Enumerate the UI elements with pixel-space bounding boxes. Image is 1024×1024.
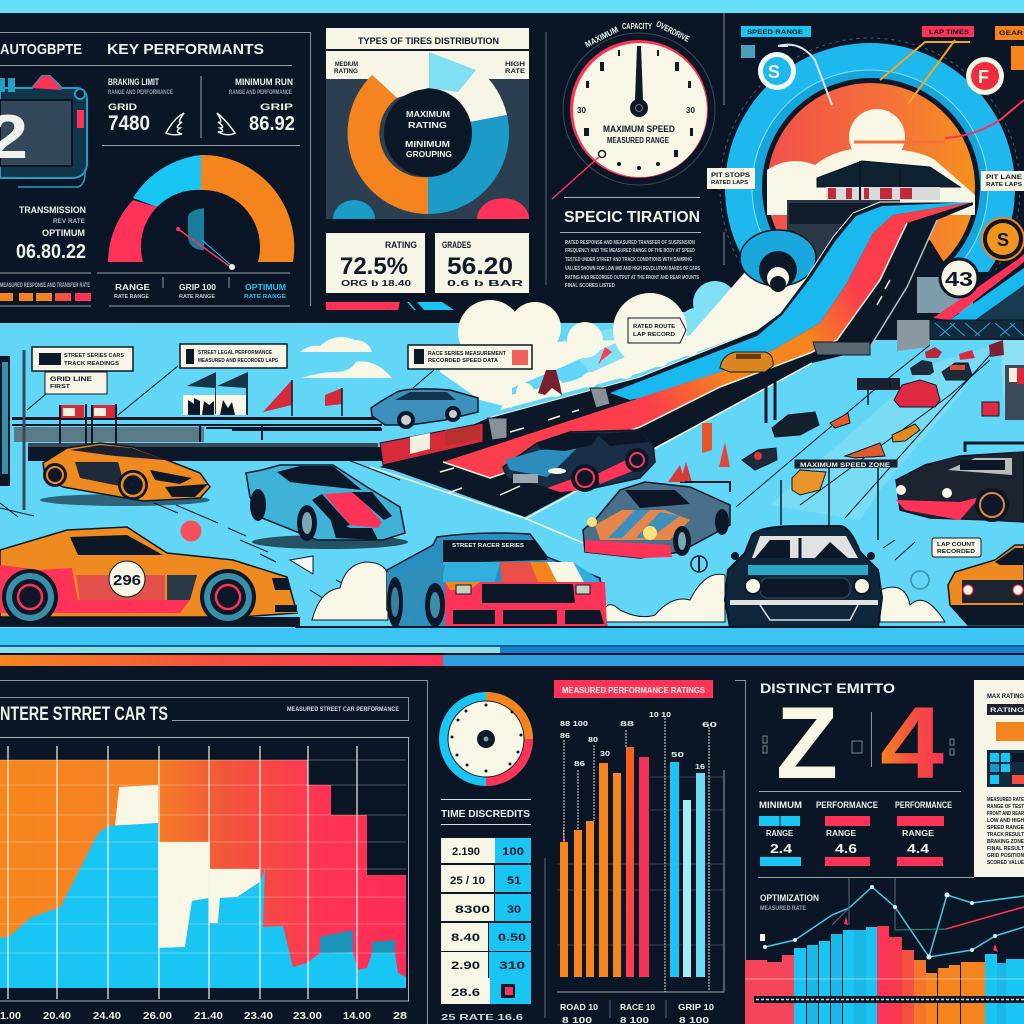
sign: left pylon bbox=[0, 350, 24, 510]
gauge footer labels: GRIP 100 bbox=[179, 283, 217, 292]
paragraph text: VALUES SHOWN FOR LOW MID AND HIGH REVOLUTION BANDS OF CARS bbox=[565, 266, 700, 272]
chart x-axis labels: 24.40 bbox=[93, 1011, 121, 1022]
gauge footer labels bbox=[114, 277, 286, 300]
stat: left metric 7480: 7480 bbox=[108, 112, 150, 135]
callout: cloud label: LAP RECORD bbox=[633, 332, 675, 338]
callout tags: PIT STOPS bbox=[711, 173, 750, 179]
legend: colour swatches bbox=[0, 293, 91, 301]
clouds: small sky clouds bbox=[300, 337, 392, 378]
callout: cloud label: RATED ROUTE bbox=[633, 324, 675, 330]
table: rows bbox=[441, 838, 531, 1004]
gauge: clock dial: MAXIMUM SPEED bbox=[603, 124, 675, 134]
stat: left readout 06.80.22: REV RATE bbox=[53, 219, 85, 225]
chart: category labels: ROAD 10 bbox=[560, 1002, 598, 1012]
heading: chart title: OPTIMIZATION bbox=[760, 893, 819, 904]
stat: right metric 86.92: MINIMUM RUN bbox=[235, 77, 293, 87]
chart: value labels: 80 bbox=[588, 735, 598, 744]
cars: distant small cars bbox=[742, 340, 1024, 495]
chart: value labels: 16 bbox=[695, 762, 705, 771]
gauge footer labels: OPTIMUM bbox=[245, 283, 286, 292]
paragraph text: FINAL SCORES LISTED bbox=[565, 283, 615, 289]
donut small labels: RATE bbox=[505, 69, 525, 75]
panel: tires donut chart bbox=[326, 28, 529, 219]
heading: street car stats: NTERE STRRET CAR TS bbox=[0, 704, 168, 725]
marker: small icons on road bbox=[691, 540, 929, 589]
strip: colour bar bbox=[0, 655, 1024, 666]
donut small labels: RATING bbox=[334, 69, 358, 75]
chart: bars bbox=[560, 747, 705, 977]
road baseline and foreground bbox=[0, 625, 1024, 653]
heading: key performance: KEY PERFORMANTS bbox=[107, 41, 264, 58]
stat group: column 3: RANGE bbox=[902, 829, 935, 838]
chart x-axis labels bbox=[0, 1011, 408, 1022]
gauge: clock dial: CAPACITY bbox=[622, 21, 652, 31]
chart x-axis labels: 28 bbox=[393, 1011, 408, 1022]
chart x-axis labels: 21.40 bbox=[194, 1011, 224, 1022]
chart: category labels: GRIP 10 bbox=[678, 1002, 714, 1012]
stat group: column 1 bbox=[759, 800, 802, 866]
badge: number 43 bbox=[940, 259, 978, 297]
car: dark blue sedan bbox=[503, 430, 655, 492]
heading: types of: TYPES OF TIRES DISTRIBUTION bbox=[358, 36, 499, 46]
table: rows: 30 bbox=[507, 904, 521, 916]
chart: category labels bbox=[560, 1000, 714, 1024]
callout: road label: LAP COUNT bbox=[937, 542, 976, 548]
gauge footer labels: RATE RANGE bbox=[244, 294, 286, 300]
gauge: clock dial: OVERDRIVE bbox=[655, 19, 691, 44]
car: right orange car bbox=[948, 545, 1024, 625]
table: rows: 51 bbox=[507, 875, 521, 887]
paragraph text on card bbox=[987, 797, 1024, 866]
cones bbox=[680, 381, 775, 482]
chart: value labels: 60 bbox=[702, 720, 717, 729]
gauge footer labels: RATE RANGE bbox=[114, 294, 149, 300]
callout tags: SPEED RANGE bbox=[747, 29, 804, 36]
card: 56.20: 0.6 b BAR bbox=[447, 279, 523, 288]
stat: left metric 7480 bbox=[108, 77, 184, 135]
callout: right label: RECORDED SPEED DATA bbox=[428, 358, 498, 364]
table: rows: 2.90 bbox=[451, 960, 480, 972]
paragraph text: RATING AND RECORDED OUTPUT AT THE FRONT AND REAR MOUNTS bbox=[565, 275, 699, 281]
chart: lines bbox=[760, 878, 1024, 960]
card: 72.5%: ORG b 18.40 bbox=[341, 279, 412, 288]
donut centre labels: MAXIMUM bbox=[406, 109, 450, 119]
icon: grid blocks bbox=[987, 750, 1024, 787]
table: rows: 100 bbox=[502, 846, 524, 858]
callout: left label: STREET SERIES CARS bbox=[64, 353, 124, 359]
illustration: ramp racetrack bbox=[370, 202, 973, 543]
road: far lane bbox=[736, 340, 1024, 520]
accent bars under cards bbox=[326, 302, 454, 310]
callout: right label: RACE SERIES MEASUREMENT bbox=[428, 351, 507, 357]
table: rows: 25 / 10 bbox=[450, 875, 485, 887]
stat: left metric 7480: BRAKING LIMIT bbox=[108, 77, 159, 87]
callout tags bbox=[707, 26, 1024, 191]
paragraph text bbox=[565, 240, 700, 289]
card: 56.20: GRADES bbox=[442, 240, 471, 250]
table: rows: 0.50 bbox=[498, 932, 526, 944]
callout tags: GEAR bbox=[999, 30, 1023, 37]
chart: value labels bbox=[560, 710, 717, 771]
marker: triangle sign bbox=[290, 556, 313, 574]
panel: combo chart bars and lines bbox=[745, 878, 1024, 1024]
banner: sponsor wall bbox=[380, 388, 610, 465]
chart: stacked area bbox=[0, 746, 406, 999]
heading: autogbpte: AUTOGBPTE bbox=[0, 41, 82, 58]
white road edge bbox=[370, 363, 812, 543]
paragraph text: TESTED UNDER STREET AND TRACK CONDITIONS WITH DAMPING bbox=[565, 257, 692, 263]
big numeral 4: 4 bbox=[880, 686, 944, 800]
paragraph text on card: LOW AND HIGH bbox=[987, 818, 1024, 824]
clouds: lower cream puffs bbox=[312, 562, 945, 622]
heading: specific vibration: SPECIC TIRATION bbox=[564, 209, 700, 226]
marker: red pennant bbox=[598, 347, 612, 365]
chart: value labels: 30 bbox=[600, 749, 610, 758]
icon: red circular badge bbox=[880, 40, 1004, 104]
gauge: clock dial bbox=[552, 19, 715, 199]
spectators and flags bbox=[60, 372, 342, 444]
stat: left metric 7480: RANGE AND PERFORMANCE bbox=[108, 90, 173, 96]
callout tags: PIT LANE bbox=[986, 175, 1022, 181]
gauge: clock dial: 30 bbox=[686, 106, 695, 115]
icon: orange circular badge: S bbox=[997, 230, 1009, 250]
stat group: column 2: PERFORMANCE bbox=[816, 800, 878, 810]
table: rows: 28.6 bbox=[451, 987, 480, 999]
icon: tire bbox=[740, 230, 816, 292]
car: orange supercar bbox=[40, 443, 210, 506]
chart x-axis labels: 23.00 bbox=[293, 1011, 323, 1022]
heading: table title: TIME DISCREDITS bbox=[441, 809, 530, 820]
card: 72.5%: RATING bbox=[385, 240, 417, 250]
chart: value labels: 86 bbox=[560, 731, 570, 740]
card: 72.5% bbox=[326, 233, 425, 293]
chart: value labels: 88 100 bbox=[560, 719, 588, 728]
big letter Z: Z bbox=[776, 686, 838, 800]
car: grey front coupe bbox=[583, 465, 730, 558]
chart: value labels: 10 10 bbox=[649, 710, 671, 719]
table: rows: 8300 bbox=[455, 904, 490, 916]
stat group: column 1: MINIMUM bbox=[759, 800, 802, 810]
chart x-axis labels: 14.00 bbox=[343, 1011, 371, 1022]
table: rows: 8.40 bbox=[451, 932, 480, 944]
paragraph text on card: GRID POSITION bbox=[987, 853, 1024, 859]
donut centre labels: MINIMUM bbox=[405, 139, 450, 149]
donut small labels bbox=[334, 62, 525, 75]
stat: right metric 86.92: 86.92 bbox=[249, 113, 295, 135]
callout: left label: TRACK READINGS bbox=[64, 361, 119, 367]
card: 56.20: 56.20 bbox=[447, 253, 513, 280]
paragraph text on card: FINAL RESULT bbox=[987, 846, 1024, 852]
stat group: column 1: RANGE bbox=[766, 829, 794, 838]
stat group: column 3: 4.4 bbox=[907, 841, 930, 856]
callout tags: LAP TIMES bbox=[929, 29, 970, 36]
stat group: column 2: RANGE bbox=[826, 829, 857, 838]
donut centre labels: GROUPING bbox=[406, 149, 452, 159]
building: grandstand bbox=[787, 161, 960, 262]
stat: left readout 06.80.22: TRANSMISSION bbox=[19, 205, 86, 215]
card: 72.5%: 72.5% bbox=[340, 253, 408, 280]
table: rows: 2.190 bbox=[452, 846, 480, 858]
donut centre labels bbox=[405, 109, 452, 159]
sun and clouds bbox=[767, 109, 975, 215]
divider bbox=[200, 76, 202, 138]
chart x-axis labels: 23.40 bbox=[244, 1011, 274, 1022]
badge: car number: 296 bbox=[113, 572, 141, 589]
illustration: circular track sunset bbox=[707, 26, 1024, 338]
heading: red banner bbox=[554, 680, 713, 698]
car: blue car upper bbox=[371, 389, 478, 429]
icon: right wing bbox=[217, 113, 235, 135]
sign: gantry bbox=[781, 460, 897, 540]
heading: distinct: DISTINCT EMITTO bbox=[760, 680, 895, 696]
paragraph text on card: SPEED RANGE bbox=[987, 825, 1024, 831]
icon: orange circular badge bbox=[982, 218, 1024, 260]
chart x-axis labels: 20.40 bbox=[43, 1011, 71, 1022]
callout: left label: GRID LINE bbox=[50, 377, 92, 383]
icon: blue dome bbox=[333, 200, 375, 219]
badge: car number bbox=[109, 561, 145, 597]
panel: distinct rating z4 bbox=[735, 680, 961, 1024]
donut small labels: HIGH bbox=[505, 62, 525, 68]
ramp edge lines bbox=[488, 202, 973, 418]
callout: left label bbox=[27, 347, 133, 410]
icon: dashboard screen with number 2 bbox=[0, 76, 87, 187]
panel: key performance bbox=[0, 32, 310, 306]
stat: right metric 86.92: GRIP bbox=[260, 102, 293, 112]
car: dark front muscle car bbox=[725, 526, 882, 628]
card: 56.20 bbox=[435, 233, 529, 293]
gauge footer labels: RANGE bbox=[115, 283, 151, 292]
header note: MEASURED STREET CAR PERFORMANCE bbox=[287, 706, 400, 713]
panel: bar chart bbox=[545, 680, 724, 1024]
gauge: clock dial: MAXIMUM bbox=[583, 24, 620, 49]
icon: blue circular badge: S bbox=[768, 62, 780, 82]
chart x-axis labels: 1.00 bbox=[0, 1011, 21, 1022]
panel: cream info card: RATING bbox=[990, 708, 1024, 714]
icon: red dome bbox=[477, 198, 529, 219]
icon: left wing bbox=[166, 113, 184, 135]
icon: red circular badge: F bbox=[978, 67, 989, 87]
illustration: lower right wall and fence bbox=[860, 240, 1024, 351]
stat: left readout 06.80.22: 06.80.22 bbox=[16, 241, 86, 263]
callout: centre label: STREET LEGAL PERFORMANCE bbox=[198, 350, 272, 356]
heading: chart title bbox=[760, 893, 819, 912]
callout tags: RATED LAPS bbox=[711, 180, 749, 186]
callout: right label bbox=[408, 345, 532, 388]
scene sky background bbox=[0, 323, 1024, 648]
chart: leader lines bbox=[564, 718, 709, 992]
car: front race car bbox=[387, 533, 607, 628]
figure: person on ramp bbox=[538, 370, 562, 395]
panel: street car stats area chart bbox=[0, 680, 428, 1024]
chart: bars bbox=[745, 926, 1024, 1024]
paragraph text: RATED RESPONSE AND MEASURED TRANSFER OF SUSPENSION bbox=[565, 240, 695, 246]
overpass bbox=[813, 342, 870, 355]
stat group: column 2 bbox=[816, 800, 878, 866]
stat: left readout 06.80.22 bbox=[0, 205, 90, 289]
chart: value labels: 86 bbox=[574, 759, 585, 768]
gauge: semicircle performance bbox=[108, 155, 294, 270]
icon: blue circular badge bbox=[758, 45, 832, 105]
panel: clock gauge and specification bbox=[546, 13, 724, 289]
donut centre labels: RATING bbox=[408, 120, 447, 130]
badge: number 43: 43 bbox=[945, 269, 973, 291]
stat group: column 1: 2.4 bbox=[770, 841, 793, 856]
car: dark front car bbox=[896, 443, 1024, 522]
gauge footer labels: RATE RANGE bbox=[179, 294, 215, 300]
callout: road label bbox=[932, 538, 981, 557]
table footer: 25 RATE 16.6 bbox=[441, 1013, 524, 1022]
chart: category labels: RACE 10 bbox=[620, 1002, 655, 1012]
top cyan band bbox=[0, 0, 1024, 13]
stat group: column 3 bbox=[895, 800, 952, 866]
chart x-axis labels: 26.00 bbox=[143, 1011, 173, 1022]
chart: value labels: 88 bbox=[620, 719, 634, 728]
illustration: fence and barrier bbox=[12, 417, 383, 461]
callout: road label: RECORDED bbox=[937, 549, 975, 555]
callout: centre label: MEASURED AND RECORDED LAPS bbox=[198, 358, 278, 364]
paragraph text: FREQUENCY AND THE MEASURED RANGE OF THE BODY AT SPEED bbox=[565, 248, 695, 254]
car: small orange on ramp bbox=[720, 352, 773, 372]
callout: centre label bbox=[118, 344, 287, 415]
callout: cloud label bbox=[628, 318, 686, 343]
gauge: clock dial: 30 bbox=[577, 106, 586, 115]
stat: left metric 7480: GRID bbox=[108, 102, 138, 112]
gauge: small dial bbox=[439, 692, 533, 786]
car: large orange side view bbox=[0, 527, 300, 627]
stat: left readout 06.80.22: OPTIMUM bbox=[42, 228, 85, 238]
gauge: clock dial: MEASURED RANGE bbox=[607, 136, 670, 145]
road dashes bbox=[440, 280, 890, 495]
donut small labels: MEDIUM bbox=[335, 62, 358, 68]
car: cyan coupe bbox=[246, 465, 408, 549]
heading: red banner: MEASURED PERFORMANCE RATINGS bbox=[562, 685, 705, 695]
road markings and dashes bbox=[0, 455, 434, 600]
callout tags: RATE LAPS bbox=[986, 182, 1023, 188]
panel: time discounts table bbox=[441, 800, 531, 1022]
stat: right metric 86.92: RANGE AND PERFORMANCE bbox=[229, 90, 292, 96]
table: rows: 310 bbox=[499, 960, 525, 972]
stat group: column 2: 4.6 bbox=[835, 841, 857, 856]
chart: value labels: 50 bbox=[671, 750, 684, 759]
stat group: column 3: PERFORMANCE bbox=[895, 800, 952, 810]
marker: red circle bbox=[180, 520, 202, 542]
stat: left readout 06.80.22: MEASURED RESPONSE AND TRANSFER RATE bbox=[0, 283, 90, 289]
clouds: large cream clouds bbox=[440, 250, 815, 410]
car: front race car: STREET RACER SERIES bbox=[452, 543, 525, 549]
panel: cream info card bbox=[974, 680, 1024, 877]
callout: left label: FIRST bbox=[50, 384, 70, 390]
stat: right metric 86.92 bbox=[217, 77, 295, 135]
heading: chart title: MEASURED RATE bbox=[760, 906, 806, 912]
sign: gantry: MAXIMUM SPEED ZONE bbox=[800, 463, 890, 469]
